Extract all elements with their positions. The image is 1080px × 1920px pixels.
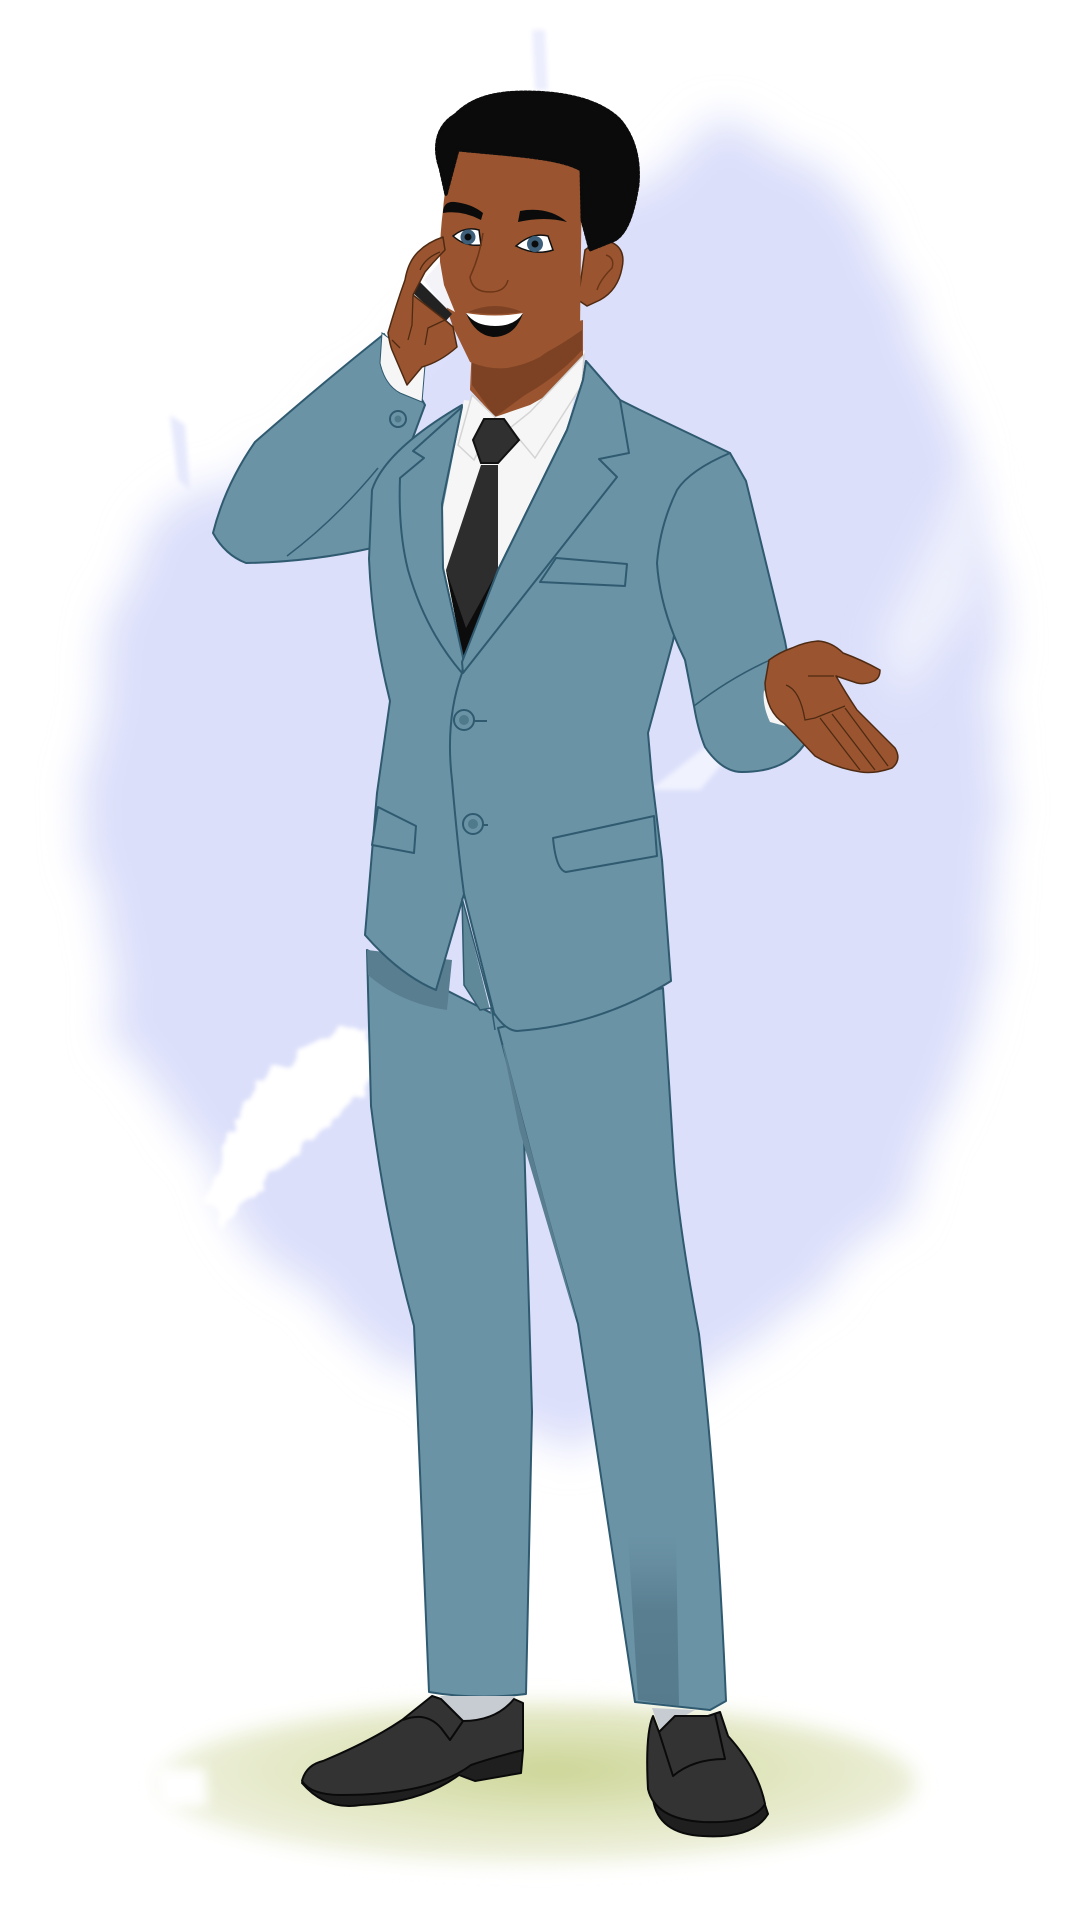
background: lighter streak centre [650,720,760,790]
hair [436,92,638,250]
sleeve crease [287,468,378,556]
shirt [442,350,585,662]
left trouser leg [367,950,532,1697]
background: white splotch [205,1028,372,1228]
open hand finger lines [786,676,888,770]
mouth [466,306,523,337]
right sock [652,1708,695,1730]
raised shirt cuff [380,333,425,402]
jacket button 1 [454,710,487,730]
ground: olive green shadow ellipse [155,1703,916,1863]
phone [413,282,452,322]
raised hand [388,237,457,385]
right sleeve [657,453,804,772]
tie [446,419,519,662]
face [440,150,582,368]
right eyebrow [518,210,567,222]
raised hand finger lines [392,252,445,348]
head [436,92,638,368]
right trouser leg [498,988,726,1710]
tie dark tip [446,570,498,662]
background: lighter streak right [880,470,985,700]
neck shadow [472,330,582,417]
left eyebrow [443,202,483,220]
jacket button 2 [463,814,488,834]
raised arm sleeve [213,334,425,563]
nose [470,233,508,292]
background: left wisp [170,415,190,490]
tie knot [473,419,519,463]
right eye [516,235,553,252]
right shirt cuff [764,690,785,726]
background: lavender watercolor blob [85,30,1000,1450]
breast pocket [540,558,627,586]
ear [578,242,623,306]
jacket left panel [365,405,464,990]
left hip pocket [372,807,416,853]
right hip pocket [553,816,657,872]
sleeve button [390,411,406,427]
background: top wisp [532,30,548,90]
ground: white patch [155,1768,208,1808]
right lapel [462,361,629,673]
left sock [440,1696,516,1724]
left shoe [302,1696,523,1806]
open hand [765,641,898,772]
jacket vent line [462,898,495,1030]
right shoe [647,1712,768,1836]
trouser shadow strip [628,1535,679,1706]
ear detail [597,255,613,290]
left eye [453,229,481,245]
collar [458,355,584,460]
left lapel [400,407,464,673]
trouser inner shade [503,1045,575,1316]
sleeve cuff crease [694,660,770,706]
jacket tail shadow on trousers [367,950,452,1010]
phone screen [424,262,455,312]
jacket right panel [450,361,730,1031]
neck [470,320,583,417]
